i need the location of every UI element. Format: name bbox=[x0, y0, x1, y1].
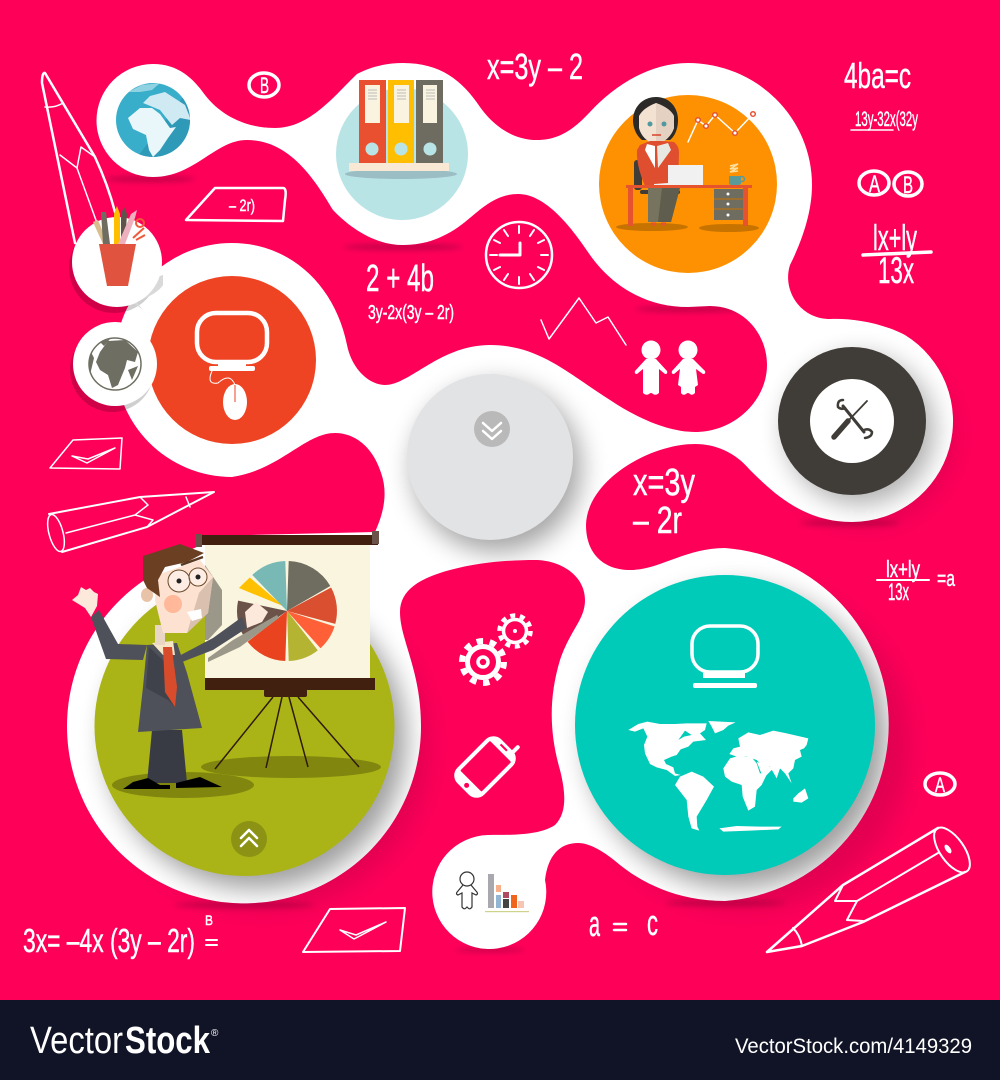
phone icon bbox=[450, 727, 525, 802]
icon: mouse bbox=[210, 371, 247, 420]
man presenting bbox=[72, 544, 279, 789]
watermark band bbox=[0, 1000, 1000, 1080]
shelf shadow bbox=[345, 169, 457, 179]
formula: a = c: c bbox=[647, 902, 658, 943]
projector screen on stand bbox=[195, 531, 379, 769]
icon: small bars bbox=[485, 874, 529, 912]
yellow binder bbox=[388, 80, 414, 163]
circled letter B top: B bbox=[260, 73, 269, 98]
shelf bbox=[349, 163, 449, 171]
clock bbox=[486, 222, 552, 288]
formula: 13y-32x(32y bbox=[851, 108, 918, 131]
laptop bbox=[654, 165, 703, 185]
coffee mug bbox=[729, 164, 744, 185]
soft darkening of pink around big circles bbox=[100, 345, 955, 910]
panel: blue globe bbox=[116, 83, 191, 160]
ground shadows bbox=[112, 756, 381, 798]
fraction right =a bbox=[877, 556, 956, 606]
formula: 3x= -4x (3y - 2r): 3x= –4x (3y – 2r) bbox=[23, 922, 195, 959]
formula: a = c: a bbox=[589, 903, 601, 944]
icon: grey globe bbox=[88, 338, 141, 390]
panel: binders bbox=[336, 80, 468, 220]
panel: red computer bbox=[148, 276, 316, 444]
circled letters A B: A bbox=[869, 171, 880, 198]
formula: x=3y: x=3y bbox=[633, 462, 695, 504]
brand name: Stock bbox=[125, 1020, 211, 1062]
line chart doodle bbox=[541, 298, 626, 345]
circled letter A bbox=[925, 773, 955, 797]
doodle: pencil left bbox=[44, 492, 214, 553]
panel: small chart bubble contents bbox=[456, 872, 529, 912]
panel: grey centre circle bbox=[407, 374, 581, 552]
pie chart bbox=[237, 561, 337, 661]
man jacket and arms bbox=[91, 610, 247, 732]
formula: 13y-32x(32y: 13y-32x(32y bbox=[855, 108, 918, 131]
formula: 3y-2x(3y - 2r): 3y-2x(3y – 2r) bbox=[368, 302, 454, 324]
icon: pencils in cup bbox=[93, 206, 145, 286]
man head bbox=[141, 544, 213, 645]
man shadow on screen bbox=[205, 565, 279, 662]
grey binder bbox=[416, 80, 443, 163]
icon: monitor bbox=[692, 626, 758, 688]
note box with check left bbox=[50, 438, 122, 469]
icon: monitor bbox=[197, 313, 267, 371]
small B equals bbox=[205, 912, 217, 945]
brand name: Vector bbox=[30, 1020, 123, 1062]
note box with formula: – 2r) bbox=[229, 196, 255, 215]
panel: green presenter bbox=[72, 531, 406, 889]
formula: - 2r: – 2r bbox=[633, 500, 682, 542]
woman bbox=[633, 97, 680, 224]
formula: 4ba=c: 4ba=c bbox=[844, 55, 911, 96]
icon: down chevrons bbox=[474, 411, 510, 447]
circled letter B top bbox=[249, 73, 279, 98]
panel: small grey globe bubble bbox=[70, 322, 157, 412]
note box with check bottom bbox=[303, 908, 405, 952]
doodle: pencil bottom right bbox=[767, 822, 977, 952]
up chevrons badge bbox=[231, 821, 267, 857]
white connected blob bbox=[67, 63, 953, 949]
small B equals: B bbox=[205, 912, 213, 928]
panel: teal world bbox=[575, 575, 887, 888]
fraction right =a: lx+ly bbox=[886, 556, 920, 582]
fraction right =a: 13x bbox=[888, 579, 909, 606]
man shirt and tie bbox=[152, 641, 177, 707]
fraction lx+ly over 13x: 13x bbox=[878, 250, 914, 291]
people icon bbox=[635, 340, 705, 395]
brand name bbox=[30, 1020, 211, 1062]
man legs and shoes bbox=[123, 730, 222, 789]
formula: x=3y - 2: x=3y – 2 bbox=[487, 46, 583, 87]
registered mark: ® bbox=[211, 1028, 219, 1039]
panel: black tools circle bbox=[778, 347, 934, 504]
icon: wrench and screwdriver bbox=[834, 400, 872, 438]
fraction lx+ly over 13x bbox=[863, 217, 931, 291]
fraction right =a: =a bbox=[937, 566, 956, 591]
red binder bbox=[359, 80, 386, 163]
circled letters A B bbox=[859, 171, 922, 199]
stock url: VectorStock.com/4149329 bbox=[735, 1035, 972, 1058]
line chart bbox=[688, 112, 755, 142]
man hands bbox=[72, 587, 268, 628]
panel: woman at desk bbox=[599, 95, 777, 273]
formula: 2 + 4b: 2 + 4b bbox=[366, 258, 434, 300]
desk bbox=[626, 185, 752, 226]
fraction lx+ly over 13x: lx+ly bbox=[873, 217, 917, 258]
doodle: large pencil top left bbox=[42, 73, 115, 243]
circled letter A: A bbox=[935, 774, 945, 797]
formula: a = c bbox=[589, 902, 658, 944]
panel: pencil holder bubble bbox=[69, 206, 163, 313]
icon: person outline bbox=[456, 872, 478, 909]
gears icon bbox=[462, 616, 530, 683]
world map bbox=[628, 721, 808, 832]
note box with formula bbox=[186, 188, 286, 221]
floor shadows bbox=[616, 223, 759, 232]
soft shadows under white shape bbox=[105, 176, 900, 952]
circled letters A B: B bbox=[903, 172, 913, 199]
